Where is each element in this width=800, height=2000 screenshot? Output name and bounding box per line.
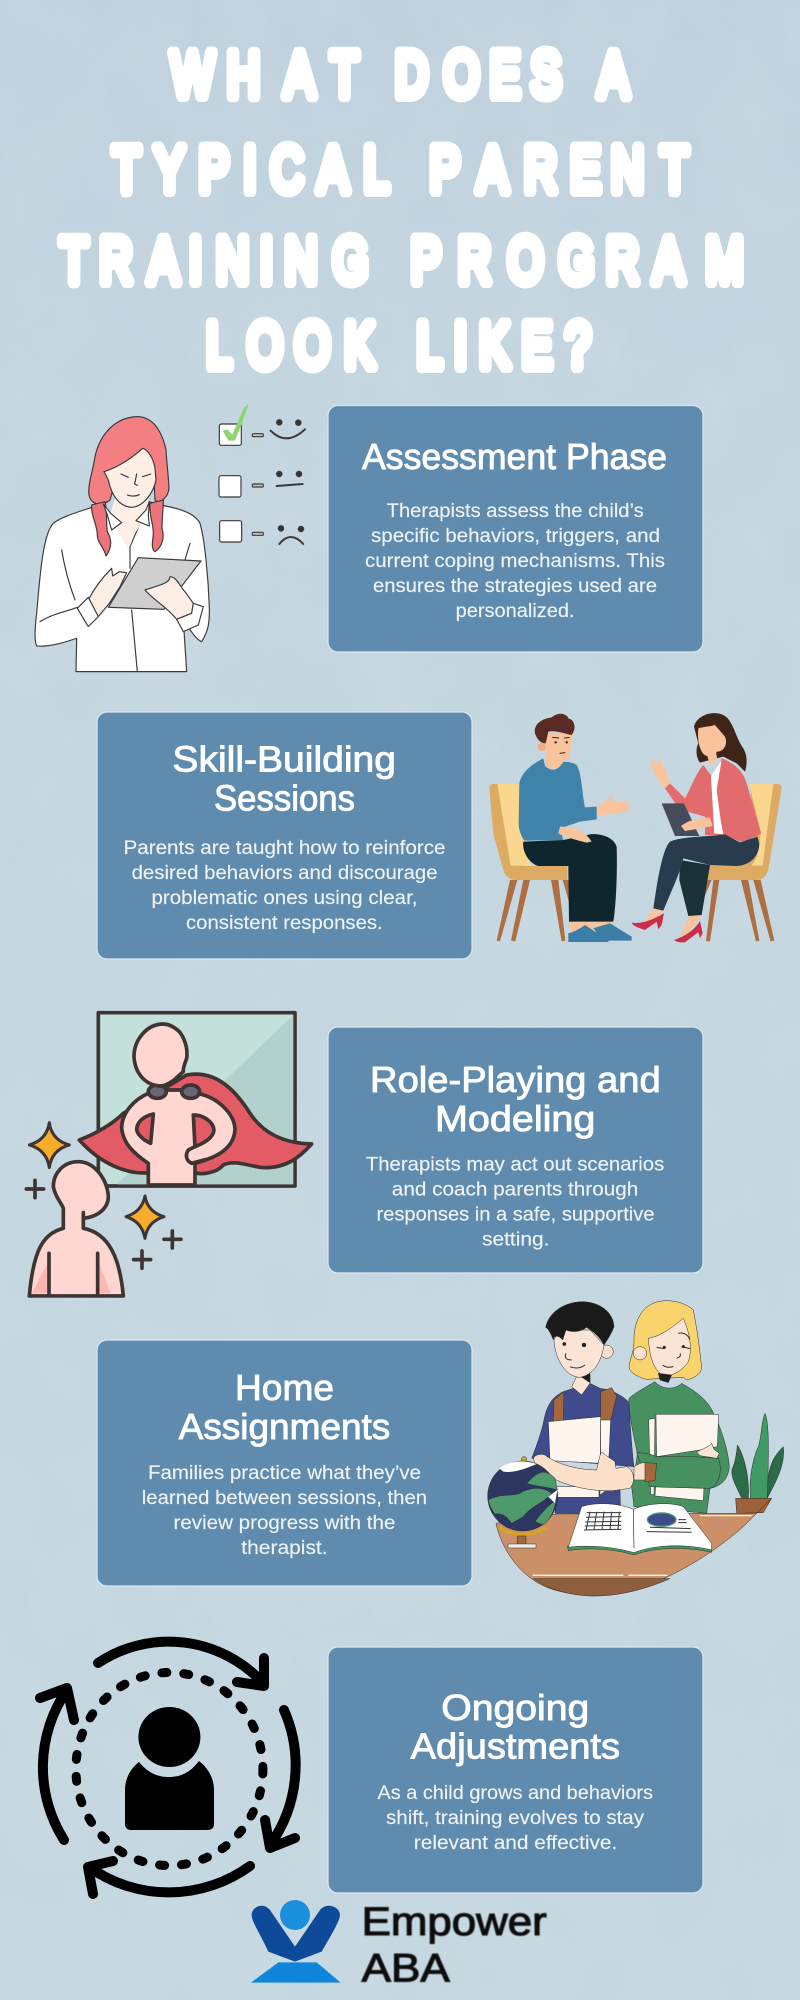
illustration: two students with books, globe and plant xyxy=(488,1301,784,1596)
right hand xyxy=(145,577,193,619)
heading xyxy=(370,1059,661,1139)
description: learned between sessions, then xyxy=(142,1488,427,1509)
panel: ongoing adjustments xyxy=(328,1647,703,1893)
heading: Home xyxy=(235,1367,334,1408)
heading: Skill-Building xyxy=(172,738,396,780)
braids xyxy=(92,502,111,556)
checkbox row: neutral xyxy=(219,471,303,497)
description xyxy=(124,838,446,934)
illustration: man and woman talking in chairs xyxy=(489,713,782,942)
logo wordmark xyxy=(362,1900,547,1990)
description xyxy=(366,1154,664,1250)
heading: Role-Playing and xyxy=(370,1059,661,1100)
description: shift, training evolves to stay xyxy=(386,1808,645,1829)
description: desired behaviors and discourage xyxy=(132,863,438,884)
table xyxy=(496,1498,772,1596)
cape xyxy=(79,1074,312,1174)
description: and coach parents through xyxy=(392,1180,638,1200)
reflection person xyxy=(29,1162,123,1296)
sparkles xyxy=(29,1123,164,1238)
hair xyxy=(89,417,169,504)
title xyxy=(60,39,743,381)
title: LOOK LIKE? xyxy=(206,310,591,381)
description: Parents are taught how to reinforce xyxy=(124,838,446,859)
description: setting. xyxy=(482,1230,550,1250)
title: TRAINING PROGRAM xyxy=(60,225,743,296)
description: responses in a safe, supportive xyxy=(376,1204,654,1226)
dashed ring xyxy=(76,1672,263,1866)
heading: Modeling xyxy=(435,1098,595,1139)
icon: person inside cycle arrows xyxy=(40,1642,296,1894)
girl's hand and sleeve xyxy=(637,1452,720,1488)
panel: role-playing and modeling xyxy=(328,1027,703,1273)
description xyxy=(378,1783,653,1854)
logo wordmark: ABA xyxy=(362,1946,450,1990)
panel: assessment phase xyxy=(328,406,703,652)
title: WHAT DOES A xyxy=(171,39,629,110)
hero body xyxy=(122,1090,235,1185)
left chair xyxy=(489,784,569,941)
heading xyxy=(179,1367,390,1447)
shirt lines xyxy=(40,543,190,672)
right chair xyxy=(698,784,782,941)
open book xyxy=(567,1504,712,1555)
illustration: woman with tablet and feedback checklist xyxy=(35,405,305,672)
cycle arrows xyxy=(40,1642,296,1894)
neck and face xyxy=(110,498,149,550)
description: review progress with the xyxy=(174,1513,395,1534)
heading xyxy=(411,1687,620,1766)
description: current coping mechanisms. This xyxy=(365,551,665,572)
person head xyxy=(138,1707,200,1767)
woman xyxy=(632,713,761,942)
shoulder pads xyxy=(148,1085,166,1098)
panel: home assignments xyxy=(97,1340,472,1586)
checkbox row: happy xyxy=(219,405,305,445)
shirt xyxy=(35,502,209,672)
heading: Adjustments xyxy=(411,1726,620,1766)
mirror xyxy=(98,1013,295,1186)
heading: Assignments xyxy=(179,1406,390,1447)
tablet xyxy=(108,558,201,609)
description: consistent responses. xyxy=(186,913,383,934)
description xyxy=(365,501,665,622)
plant xyxy=(732,1413,784,1513)
panel: skill-building sessions xyxy=(97,712,472,959)
heading: Sessions xyxy=(214,778,355,818)
heading: Assessment Phase xyxy=(362,436,667,477)
logo mark xyxy=(251,1900,341,1983)
person body xyxy=(125,1761,214,1830)
plus marks xyxy=(26,1180,181,1268)
girl xyxy=(629,1301,729,1513)
description xyxy=(142,1463,427,1559)
description: Therapists may act out scenarios xyxy=(366,1154,664,1176)
right cuff xyxy=(177,603,203,632)
man xyxy=(519,714,632,942)
left hand xyxy=(88,568,127,617)
heading xyxy=(172,738,396,818)
illustration: person seeing superhero in mirror xyxy=(26,1013,312,1296)
description: personalized. xyxy=(456,601,575,622)
girl's papers xyxy=(649,1414,719,1501)
title: TYPICAL PARENT xyxy=(113,134,688,205)
description: Families practice what they’ve xyxy=(148,1463,421,1484)
boy xyxy=(532,1302,657,1513)
description: therapist. xyxy=(241,1538,328,1559)
logo: Empower ABA xyxy=(251,1900,547,1990)
description: specific behaviors, triggers, and xyxy=(371,526,660,547)
description: relevant and effective. xyxy=(414,1833,617,1854)
globe xyxy=(488,1457,558,1548)
collar xyxy=(103,502,149,530)
description: ensures the strategies used are xyxy=(373,576,657,597)
hero head xyxy=(134,1024,187,1086)
description: problematic ones using clear, xyxy=(152,888,418,909)
left cuff xyxy=(77,597,98,627)
heading: Ongoing xyxy=(441,1687,589,1728)
arm gaps xyxy=(137,1114,214,1147)
checkbox row: sad xyxy=(220,521,304,544)
description: Therapists assess the child’s xyxy=(387,501,644,522)
logo wordmark: Empower xyxy=(362,1900,547,1944)
description: As a child grows and behaviors xyxy=(378,1783,653,1804)
